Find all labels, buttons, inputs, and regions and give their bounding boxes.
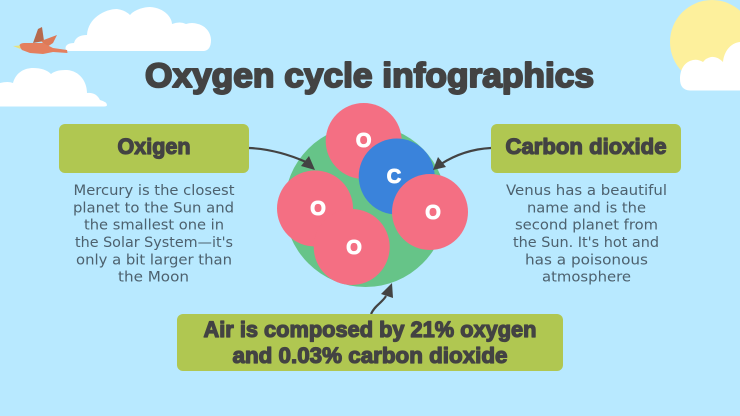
oxygen atom: bottom: O bbox=[346, 237, 362, 259]
air circle bbox=[284, 125, 446, 287]
cloud: left bbox=[0, 68, 107, 106]
panel: air composition callout bbox=[177, 314, 563, 371]
oxygen atom: bottom bbox=[314, 209, 390, 285]
arrow: carbon dioxide to diagram bbox=[433, 148, 491, 170]
arrow: air fact to diagram bbox=[371, 283, 393, 314]
icon: bird bbox=[13, 27, 68, 54]
text block: carbon dioxide description: has a poisonous bbox=[525, 252, 648, 268]
panel: air composition callout: Air is composed by 21% oxygen bbox=[204, 317, 536, 342]
text block: oxygen description: the smallest one in bbox=[84, 218, 224, 234]
oxygen atom: right: O bbox=[425, 202, 441, 224]
carbon atom bbox=[359, 138, 435, 214]
text block: carbon dioxide description: second planet from bbox=[515, 218, 658, 234]
diagram: air molecules bbox=[277, 103, 468, 287]
oxygen atom: top bbox=[326, 103, 402, 179]
title: Oxygen cycle infographics bbox=[145, 57, 594, 95]
panel: carbon dioxide label bbox=[491, 124, 681, 173]
text block: oxygen description: the Moon bbox=[118, 270, 189, 286]
text block: carbon dioxide description: Venus has a beautiful bbox=[506, 183, 667, 199]
text block: carbon dioxide description: the Sun. It's hot and bbox=[513, 235, 659, 251]
oxygen atom: left: O bbox=[310, 198, 326, 220]
panel: oxygen label: Oxigen bbox=[118, 134, 190, 159]
text block: carbon dioxide description: atmosphere bbox=[542, 270, 631, 286]
panel: carbon dioxide label: Carbon dioxide bbox=[506, 134, 666, 159]
arrow: oxygen to diagram bbox=[249, 148, 315, 170]
cloud: right bbox=[680, 42, 740, 90]
cloud: top left bbox=[66, 7, 211, 51]
oxygen atom: top: O bbox=[356, 130, 371, 152]
panel: oxygen label bbox=[59, 124, 249, 173]
oxygen atom: left bbox=[277, 170, 353, 246]
text block: carbon dioxide description: name and is the bbox=[527, 200, 646, 216]
text block: oxygen description bbox=[73, 183, 235, 286]
carbon atom: C bbox=[387, 166, 401, 188]
text block: oxygen description: Mercury is the closest bbox=[74, 183, 235, 199]
text block: oxygen description: the Solar System—it's bbox=[75, 235, 233, 251]
panel: air composition callout: and 0.03% carbon dioxide bbox=[232, 343, 508, 368]
text block: carbon dioxide description bbox=[506, 183, 667, 286]
text block: oxygen description: only a bit larger than bbox=[76, 252, 232, 268]
text block: oxygen description: planet to the Sun and bbox=[73, 200, 234, 216]
sun bbox=[670, 0, 740, 84]
oxygen atom: right bbox=[392, 174, 468, 250]
